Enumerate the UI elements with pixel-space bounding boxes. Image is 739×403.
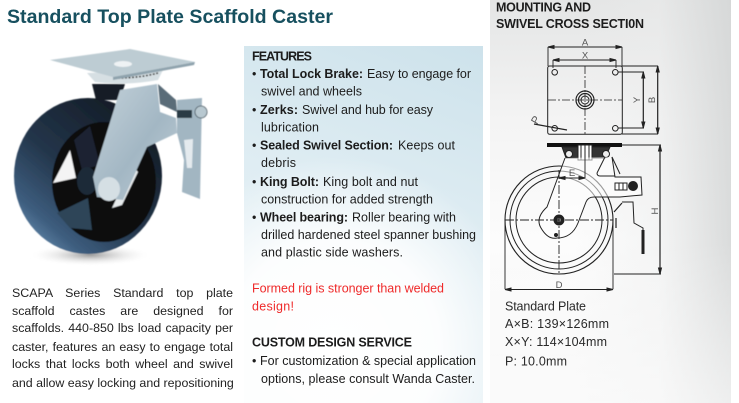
title: Standard Top Plate Scaffold Caster (7, 6, 333, 28)
panel: mounting and swivel cross section background (490, 0, 731, 403)
product description: and allow easy locking and repositioning (12, 376, 234, 390)
rubber tyre (14, 98, 162, 254)
red callout: design! (252, 300, 294, 314)
plate specifications: Standard Plate (505, 300, 586, 314)
feature: sealed swivel section: debris (261, 156, 296, 170)
feature: wheel bearing: Wheel bearing: (260, 211, 348, 225)
feature: zerks: Zerks: (260, 103, 298, 117)
feature: sealed swivel section (252, 138, 456, 170)
dimension labels: side view: D (556, 280, 563, 291)
product description (12, 286, 234, 390)
feature: total lock brake: • (252, 67, 256, 81)
product description: locks that locks both wheel and swivel (12, 357, 233, 371)
dimension labels: top view: Y (632, 96, 643, 103)
feature: king bolt: King bolt and nut (323, 175, 419, 189)
feature: king bolt (252, 175, 433, 206)
feature: sealed swivel section: • (252, 138, 256, 152)
dimension labels: top view: X (582, 50, 589, 62)
ground shadow (28, 244, 152, 266)
product description: SCAPA Series Standard top plate (12, 286, 233, 300)
feature: wheel bearing: • (252, 211, 256, 225)
diagram: side view of caster (505, 145, 662, 291)
feature: king bolt: construction for added strength (261, 192, 433, 206)
custom design service heading: CUSTOM DESIGN SERVICE (252, 336, 412, 350)
diagram: top view of mounting plate (534, 46, 659, 134)
swivel housing (92, 84, 125, 100)
feature: wheel bearing: and plastic side washers. (261, 246, 403, 260)
red callout (252, 282, 444, 314)
custom design service text: options, please consult Wanda Caster. (261, 372, 475, 386)
dimension labels: top view: A (582, 38, 589, 48)
dimension labels: top view (529, 38, 658, 126)
dimension labels: top view: B (647, 97, 658, 103)
top plate (50, 49, 195, 77)
cross section heading: MOUNTING AND (496, 1, 591, 15)
feature: wheel bearing: drilled hardened steel spanner bushing (261, 228, 476, 242)
cross section heading: SWIVEL CROSS SECTI0N (496, 17, 644, 31)
fork (93, 84, 177, 200)
feature: wheel bearing (252, 211, 476, 260)
rim openings (53, 126, 138, 230)
feature: wheel bearing: Roller bearing with (352, 211, 456, 225)
feature: total lock brake: Total Lock Brake: (260, 67, 363, 81)
panel: features background (244, 46, 483, 403)
feature: total lock brake: Easy to engage for (367, 67, 471, 81)
feature: zerks (252, 103, 434, 135)
custom design service text (252, 354, 476, 386)
custom design service text: For customization & special application (260, 354, 476, 368)
feature: zerks: Swivel and hub for easy (302, 103, 434, 117)
feature: king bolt: King Bolt: (260, 175, 319, 189)
lever bolt (177, 106, 207, 118)
cross section heading (496, 1, 644, 31)
feature: total lock brake (252, 67, 471, 99)
plate specifications (505, 300, 609, 369)
feature list (252, 67, 476, 260)
feature: zerks: • (252, 103, 256, 117)
plate specifications: A×B: 139×126mm (505, 317, 609, 331)
bearing ring (87, 70, 163, 84)
feature: sealed swivel section: Sealed Swivel Section: (260, 138, 393, 152)
product description: scaffolds. 440-850 lbs load capacity per (12, 321, 233, 335)
red callout: Formed rig is stronger than welded (252, 282, 444, 296)
feature: king bolt: • (252, 175, 256, 189)
dimension labels: side view: H (650, 207, 661, 214)
product description: scaffold castes are designed for (12, 304, 233, 318)
dimension labels: side view: E (569, 168, 575, 179)
custom design service text: • (252, 354, 256, 368)
wheel rim (52, 122, 156, 242)
features heading: FEATURES (252, 50, 312, 64)
feature: zerks: lubrication (261, 121, 319, 135)
brake lever (177, 98, 202, 199)
axle bolt (98, 177, 120, 201)
plate specifications: P: 10.0mm (505, 355, 567, 369)
hub (77, 167, 97, 195)
feature: total lock brake: swivel and wheels (261, 85, 362, 99)
product description: caster, features an easy to engage total (12, 340, 233, 354)
product photo: caster (14, 49, 207, 266)
dimension labels: top view: P (529, 114, 543, 126)
dimension labels: side view (556, 168, 661, 291)
feature: sealed swivel section: Keeps out (398, 138, 456, 152)
plate specifications: X×Y: 114×104mm (505, 335, 607, 349)
